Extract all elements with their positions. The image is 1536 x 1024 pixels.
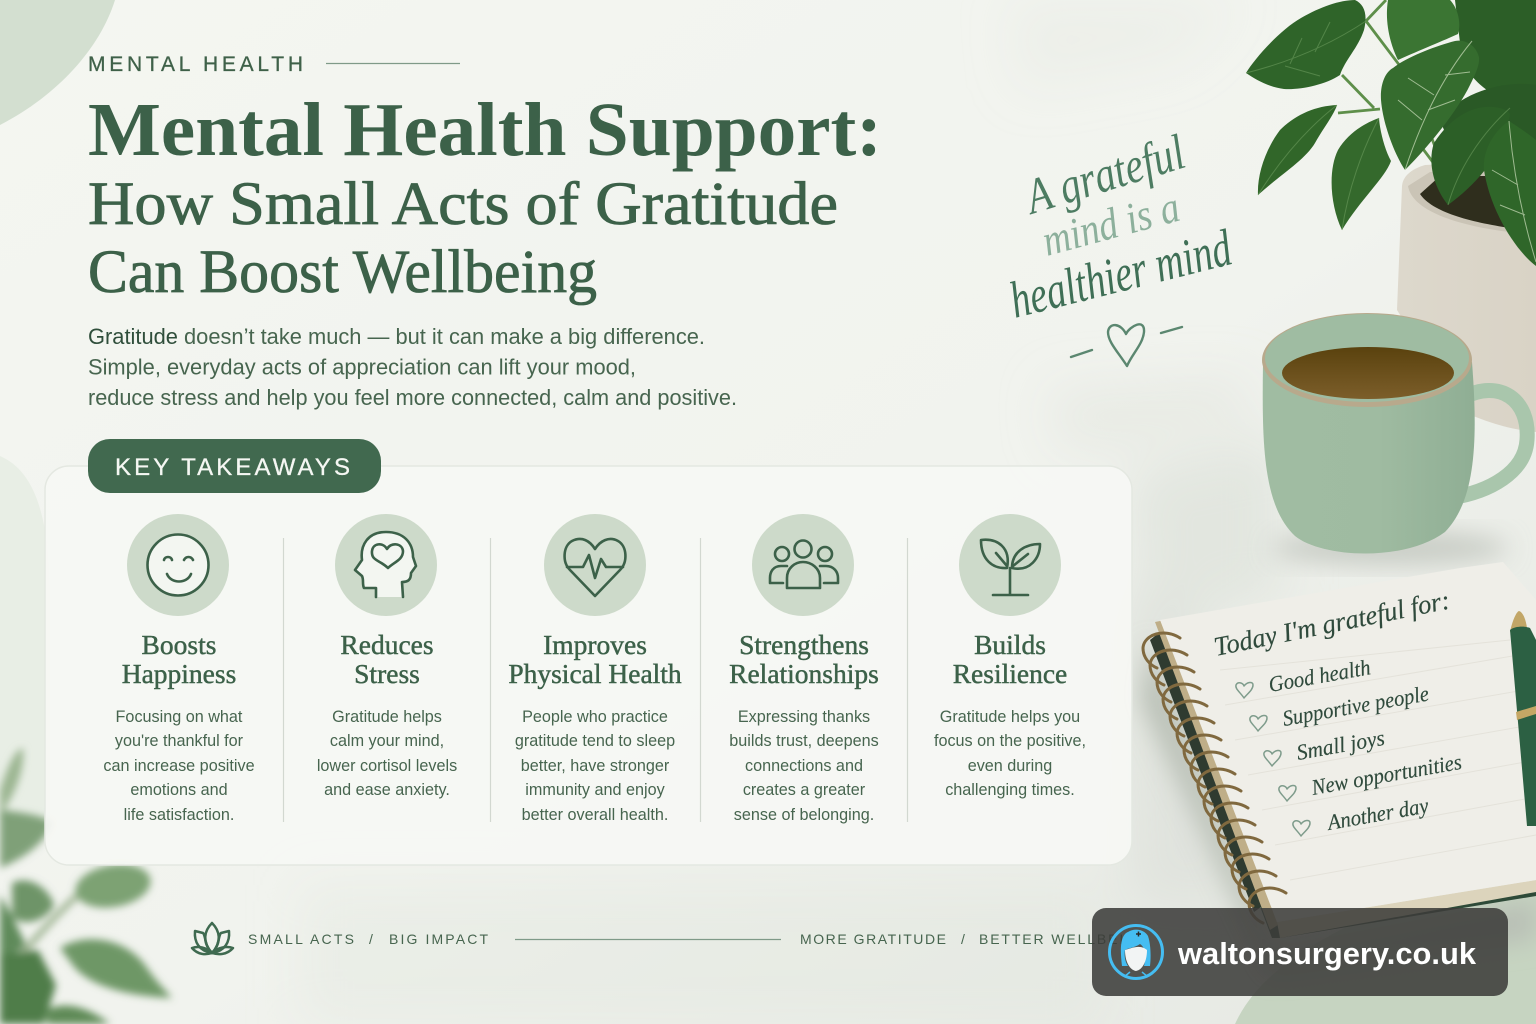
spiral binding xyxy=(1143,633,1286,923)
window light shadows xyxy=(300,0,1280,1024)
column: strengthens relationships xyxy=(729,514,879,824)
column: strengthens relationships: creates a greater xyxy=(743,781,866,799)
column: strengthens relationships: Strengthens xyxy=(739,629,869,660)
intro text: Simple, everyday acts of appreciation can lift your mood, xyxy=(88,354,636,380)
footer strip xyxy=(192,923,1150,954)
page block xyxy=(1157,634,1536,938)
icon: hand drawn heart xyxy=(1071,324,1182,366)
icon: nurse logo xyxy=(1110,926,1162,978)
footer strip: SMALL ACTS xyxy=(248,931,356,947)
intro text: reduce stress and help you feel more connected, calm and positive. xyxy=(88,385,737,410)
column: boosts happiness: Boosts xyxy=(142,629,216,660)
column: reduces stress: Gratitude helps xyxy=(332,708,442,726)
footer strip: BIG IMPACT xyxy=(389,931,490,947)
column: improves physical health: Physical Health xyxy=(508,658,682,689)
watermark badge xyxy=(1092,908,1508,996)
column: reduces stress: lower cortisol levels xyxy=(317,757,457,775)
gratitude list: Supportive people xyxy=(1281,681,1431,731)
column: reduces stress: Stress xyxy=(354,658,420,689)
gratitude list: New opportunities xyxy=(1309,749,1464,800)
column: builds resilience: challenging times. xyxy=(945,781,1075,799)
intro text xyxy=(88,324,737,410)
paper xyxy=(1160,562,1536,922)
column: builds resilience xyxy=(934,514,1086,799)
column: strengthens relationships: connections and xyxy=(745,757,863,775)
column: improves physical health: People who practice xyxy=(522,708,668,726)
column: boosts happiness: life satisfaction. xyxy=(124,806,234,824)
gratitude list: Good health xyxy=(1267,654,1372,697)
column: improves physical health: better, have stronger xyxy=(521,757,670,775)
quote: a grateful mind is a healthier mind: mind is a xyxy=(1037,182,1185,266)
gratitude list: Small joys xyxy=(1295,725,1387,765)
note heading: Today I'm grateful for: xyxy=(1211,585,1452,662)
footer strip: / xyxy=(369,931,373,947)
column: boosts happiness: Happiness xyxy=(122,658,236,689)
column: builds resilience: even during xyxy=(968,757,1052,775)
title xyxy=(88,88,882,306)
column: reduces stress: and ease anxiety. xyxy=(324,781,450,799)
column: reduces stress: Reduces xyxy=(340,629,434,660)
column: improves physical health xyxy=(508,514,682,824)
title: Can Boost Wellbeing xyxy=(88,239,597,306)
column: reduces stress xyxy=(317,514,457,799)
mug of tea xyxy=(1262,313,1527,554)
panel: key takeaways xyxy=(45,439,1132,865)
column: strengthens relationships: builds trust, deepens xyxy=(729,732,879,750)
column: builds resilience: Gratitude helps you xyxy=(940,708,1080,726)
column: improves physical health: immunity and enjoy xyxy=(525,781,666,799)
column: boosts happiness: can increase positive xyxy=(103,757,255,775)
column: boosts happiness xyxy=(103,514,255,824)
column: strengthens relationships: sense of belonging. xyxy=(734,806,874,824)
column: boosts happiness: Focusing on what xyxy=(116,708,243,726)
quote: a grateful mind is a healthier mind: A grateful xyxy=(1017,123,1191,225)
column: reduces stress: calm your mind, xyxy=(330,732,444,750)
binding gap xyxy=(1150,632,1264,912)
quote: a grateful mind is a healthier mind: healthier mind xyxy=(1004,219,1238,330)
icon: three people xyxy=(770,540,838,588)
ruled lines xyxy=(1220,640,1536,880)
icon: sprout xyxy=(981,540,1040,595)
pen xyxy=(1510,611,1536,826)
mug shadow xyxy=(1272,530,1508,566)
quote: a grateful mind is a healthier mind xyxy=(1004,123,1238,366)
icon: lotus xyxy=(192,923,233,954)
icon: heart with pulse xyxy=(565,539,625,596)
column: builds resilience: focus on the positive, xyxy=(934,732,1086,750)
gratitude list: Another day xyxy=(1324,793,1431,835)
gratitude list xyxy=(1236,654,1464,836)
icon: head with heart xyxy=(355,532,416,597)
column: boosts happiness: you're thankful for xyxy=(115,732,244,750)
column: builds resilience: Resilience xyxy=(953,658,1067,689)
column: improves physical health: better overall health. xyxy=(522,806,668,824)
decorative blob: bottom right xyxy=(1235,885,1536,1024)
column: builds resilience: Builds xyxy=(974,629,1046,660)
title: Mental Health Support: xyxy=(88,88,882,172)
spine xyxy=(1155,620,1278,930)
title: How Small Acts of Gratitude xyxy=(88,171,838,238)
column: strengthens relationships: Relationships xyxy=(729,658,879,689)
intro text: Gratitude doesn’t take much — but it can make a big difference. xyxy=(88,324,705,349)
icon: smiley xyxy=(148,534,208,596)
footer strip: BETTER WELLBEING xyxy=(979,931,1150,947)
footer strip: MORE GRATITUDE xyxy=(800,931,948,947)
decorative blob: left xyxy=(0,456,50,820)
badge: key takeaways: KEY TAKEAWAYS xyxy=(115,454,353,481)
plant pot xyxy=(1397,160,1536,432)
footer strip: / xyxy=(961,931,965,947)
notebook shadow xyxy=(1140,640,1536,975)
column: strengthens relationships: Expressing thanks xyxy=(738,708,870,726)
plant leaves xyxy=(1246,0,1536,266)
decorative blob: top left xyxy=(0,0,115,125)
watermark badge: waltonsurgery.co.uk xyxy=(1177,936,1477,971)
column: improves physical health: Improves xyxy=(543,629,647,660)
badge: key takeaways xyxy=(88,439,381,493)
blurred plant: bottom left xyxy=(0,748,172,1024)
notebook xyxy=(1143,562,1536,938)
column: improves physical health: gratitude tend to sleep xyxy=(515,732,675,750)
eyebrow: mental health: MENTAL HEALTH xyxy=(88,53,306,76)
column: boosts happiness: emotions and xyxy=(130,781,228,799)
